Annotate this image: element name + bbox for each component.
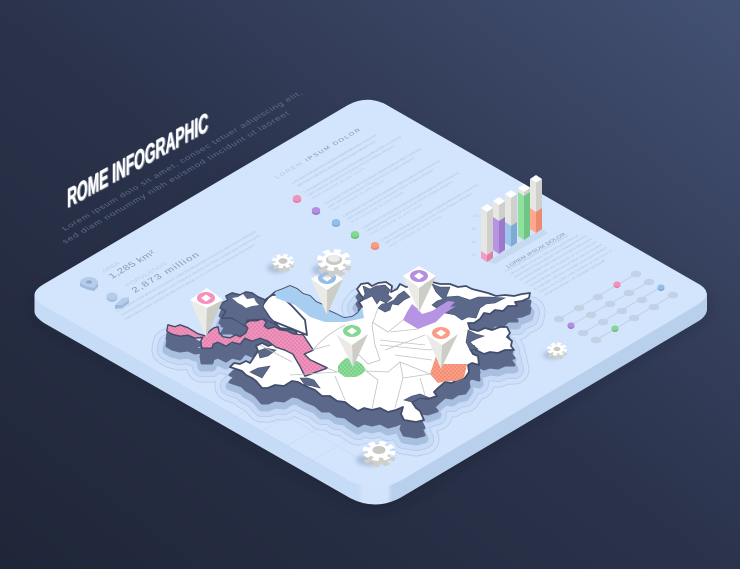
heading: LOREM IPSUM DOLOR [505, 232, 568, 269]
legend paragraphs: Lorem ipsum dolor sit amet consectetuer adipiscing elit sed diam nonummy [379, 182, 480, 242]
paragraph: suscipit lobortis nisl ut aliquip ex ea commodo [522, 239, 599, 285]
title block [60, 89, 304, 245]
highlighted timeline dots [568, 281, 664, 332]
area and population figures [101, 249, 203, 295]
board [34, 100, 707, 504]
legend paragraphs: erat volutpat ut wisi enim [387, 214, 443, 248]
legend dots [293, 195, 379, 250]
area and population figures: 1,285 km² [107, 249, 159, 281]
white island [232, 294, 259, 308]
map contour halo [167, 301, 530, 441]
district boundaries [260, 308, 445, 409]
legend paragraphs: erat volutpat ut wisi enim [368, 202, 424, 236]
paragraph: Lorem ipsum dolor sit amet consectetuer adipiscing [503, 233, 570, 273]
timeline dot rows [554, 271, 678, 343]
bar chart [472, 175, 548, 264]
paragraph: laoreet dolore magna aliquam erat volutpat ut wisi enim [512, 233, 589, 279]
paragraph: dolore eu feugiat nulla facilisis at vero eros et [537, 248, 614, 294]
stats description: ut laoreet dolore magna aliquam erat volutpat ut wisi enim ad minim veniam quis nostrud exerci [119, 234, 261, 317]
stats block [80, 229, 261, 321]
district: pink [167, 319, 327, 376]
bar 5 salmon [530, 175, 542, 233]
pin: salmon [426, 324, 458, 369]
pin: pink [190, 288, 223, 337]
pin: blue [311, 268, 343, 315]
icon: location pin [80, 277, 98, 291]
paragraph [503, 233, 614, 297]
stats description: Lorem ipsum dolor sit amet consectetuer adipiscing elit sed diam nonummy nibh euismod tincidunt [115, 229, 258, 313]
legend paragraphs: nibh euismod tincidunt ut laoreet dolore magna aliquam [326, 155, 417, 209]
district: blue [275, 286, 364, 322]
legend paragraphs: nibh euismod tincidunt ut laoreet dolore magna aliquam [383, 191, 474, 245]
axis labels: 40 [472, 252, 477, 257]
Rome map [167, 266, 530, 441]
axis labels: 80 [472, 226, 477, 231]
intro lines: Lorem ipsum dolor sit amet consectetuer adipiscing elit sed diam nonummy [290, 133, 378, 185]
bar 3 blue [505, 190, 517, 247]
intro text: Lorem ipsum dolo sit amet, consec tetuer adipiscing elit, [60, 89, 304, 232]
legend paragraphs: erat volutpat ut wisi enim [349, 190, 405, 224]
bar 1 pink [481, 204, 493, 262]
legend paragraphs: nibh euismod tincidunt ut laoreet dolore magna aliquam [364, 179, 455, 233]
area and population figures: 2,873 million [130, 251, 203, 295]
icon: gear bottom [356, 443, 392, 466]
axis labels: 60 [472, 239, 477, 244]
heading: LOREM IPSUM DOLOR [274, 127, 363, 180]
paragraph: elit sed diam nonummy nibh euismod tincidunt ut [508, 233, 580, 276]
title: ROME INFOGRAPHIC [67, 107, 208, 215]
district: purple [403, 301, 456, 329]
paragraph: accumsan et iusto odio dignissim qui blandit [542, 258, 607, 297]
axis labels [472, 213, 479, 257]
icon: person [106, 292, 129, 309]
icon: small gear top [267, 255, 292, 273]
paragraph: in vulputate velit esse molestie consequat vel illum [532, 245, 609, 291]
legend paragraphs: nibh euismod tincidunt ut laoreet dolore magna aliquam [345, 167, 436, 221]
map top surface [167, 282, 530, 422]
legend paragraphs: Lorem ipsum dolor sit amet consectetuer adipiscing elit sed diam nonummy [302, 134, 403, 194]
area and population figures: AREA [101, 260, 123, 274]
paragraph: ad minim veniam quis nostrud exerci tation ullamcorper [517, 236, 594, 282]
bar 2 purple [493, 197, 505, 254]
board shadow [34, 113, 706, 506]
map extrusion [167, 297, 530, 437]
legend paragraphs [302, 134, 480, 248]
dark northwest lump [220, 292, 290, 333]
bar 4 green [518, 184, 530, 240]
stats description: tation ullamcorper suscipit lobortis nisl ut aliquip ex ea commodo consequat duis autem [123, 242, 257, 321]
faint grid on board [200, 320, 475, 477]
legend paragraphs: Lorem ipsum dolor sit amet consectetuer adipiscing elit sed diam nonummy [341, 158, 442, 218]
text panel: lorem ipsum dolor [274, 127, 480, 250]
icon: large gear top [312, 251, 348, 276]
dark inlets [250, 284, 505, 402]
district: salmon [430, 356, 467, 383]
legend paragraphs: erat volutpat ut wisi enim [330, 178, 386, 212]
icon: small gear right [543, 344, 565, 359]
axis labels: 100 [472, 213, 479, 218]
text panel: right [503, 232, 614, 297]
intro text: sed diam nonummy nibh euismod tincidunt ut laoreet [60, 109, 292, 245]
paragraph: consequat duis autem vel eum iriure dolor in hendrerit [527, 242, 604, 288]
intro lines: nibh euismod tincidunt ut laoreet dolore magna aliquam erat [295, 139, 377, 188]
area and population figures: POPULATION [125, 261, 170, 288]
legend paragraphs: Lorem ipsum dolor sit amet consectetuer adipiscing elit sed diam nonummy [322, 146, 423, 206]
legend paragraphs: Lorem ipsum dolor sit amet consectetuer adipiscing elit sed diam nonummy [360, 170, 461, 230]
legend paragraphs: nibh euismod tincidunt ut laoreet dolore magna aliquam [306, 143, 397, 197]
pin: green [336, 323, 368, 367]
pin: purple [403, 266, 436, 312]
district: green [338, 358, 366, 377]
legend paragraphs: erat volutpat ut wisi enim [310, 166, 366, 200]
